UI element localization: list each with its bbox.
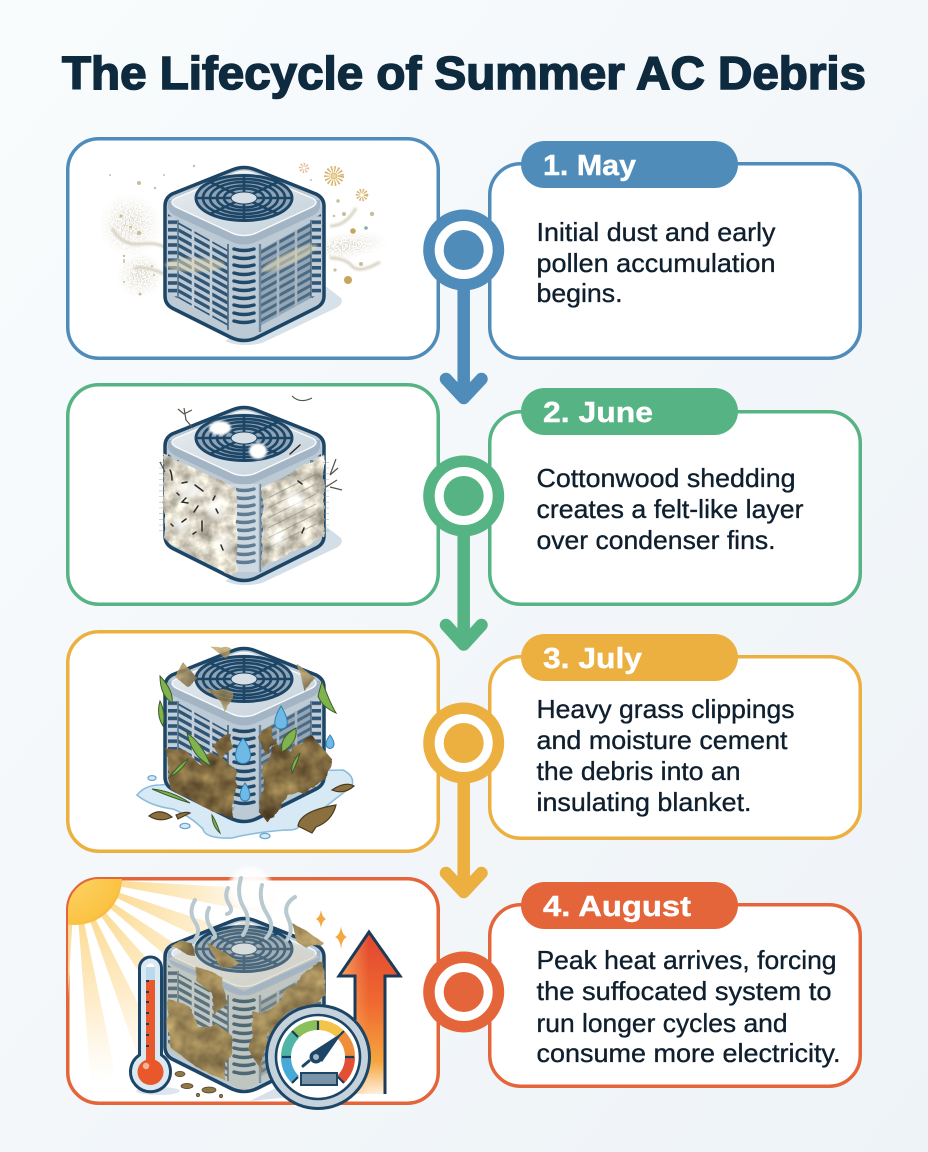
debris on left face xyxy=(164,747,238,819)
panel: May illustration xyxy=(68,139,438,358)
puddle xyxy=(137,770,353,838)
text: July description: the debris into an xyxy=(536,756,740,786)
card: August xyxy=(490,882,860,1086)
text: August description xyxy=(536,945,840,1068)
text: June description: over condenser fins. xyxy=(536,525,776,555)
icon: AC unit caked in debris xyxy=(165,918,340,1101)
leaves and grass xyxy=(152,676,336,833)
text: August description: run longer cycles and xyxy=(536,1008,788,1038)
label: 4. August xyxy=(521,882,738,929)
fallen leaves xyxy=(149,784,354,833)
icon: thermometer xyxy=(130,957,180,1095)
icon: rising arrow xyxy=(339,932,400,1094)
text: June description: Cottonwood shedding xyxy=(536,463,796,493)
caked debris xyxy=(168,999,232,1081)
connector: June node and arrow xyxy=(429,461,498,644)
text: May description xyxy=(536,217,776,308)
icon: sparkles xyxy=(316,910,347,949)
text: May description: begins. xyxy=(536,278,622,308)
card: July xyxy=(490,634,860,838)
label: 4. August: 4. August xyxy=(543,891,691,923)
text: July description xyxy=(536,694,794,817)
icon: steam wisps xyxy=(192,878,295,942)
card: June xyxy=(490,388,860,604)
text: August description: the suffocated system to xyxy=(536,976,832,1006)
card: May xyxy=(490,141,860,358)
connector: May node and arrow xyxy=(429,215,498,398)
title: The Lifecycle of Summer AC Debris xyxy=(62,47,866,99)
icon: AC unit, clean xyxy=(165,168,342,345)
debris on right face xyxy=(258,733,330,823)
text: May description: pollen accumulation xyxy=(536,248,776,278)
icon: pressure gauge xyxy=(265,1004,371,1110)
label: 2. June xyxy=(521,388,738,435)
label: 3. July: 3. July xyxy=(543,643,642,675)
icon: AC unit covered in cottonwood xyxy=(160,396,342,585)
label: 1. May xyxy=(521,141,738,188)
node: August xyxy=(429,957,498,1027)
text: June description: creates a felt-like layer xyxy=(536,494,804,524)
panel: July illustration xyxy=(68,632,438,851)
text: June description xyxy=(536,463,804,555)
label: 2. June: 2. June xyxy=(543,397,653,429)
text: August description: consume more electricity. xyxy=(536,1038,840,1068)
felt on left face xyxy=(164,454,238,576)
felt on right face xyxy=(262,454,324,568)
icon: sun and rays xyxy=(68,879,262,1067)
debris crumbs xyxy=(175,1071,223,1098)
panel: August illustration xyxy=(66,868,440,1110)
label: 1. May: 1. May xyxy=(543,150,636,182)
panel: June illustration xyxy=(68,385,438,604)
glow behind steam xyxy=(226,864,274,912)
text: May description: Initial dust and early xyxy=(536,217,776,247)
label: 3. July xyxy=(521,634,738,681)
text: July description: Heavy grass clippings xyxy=(536,694,794,724)
connector: July node and arrow xyxy=(429,708,498,892)
text: August description: Peak heat arrives, forcing xyxy=(536,945,836,975)
water drops xyxy=(235,706,334,801)
icon: AC unit with wet grass debris xyxy=(137,646,354,839)
icon: dust and pollen around AC xyxy=(98,150,391,320)
text: July description: insulating blanket. xyxy=(536,787,752,817)
text: July description: and moisture cement xyxy=(536,725,788,755)
